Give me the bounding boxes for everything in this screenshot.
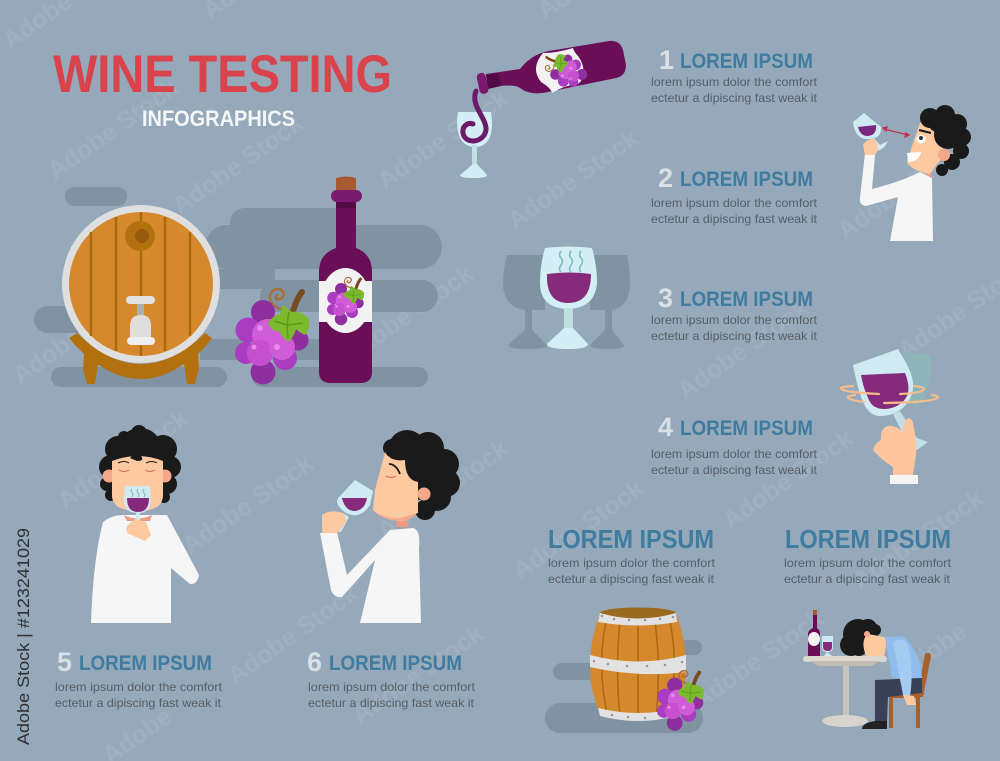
step 1 text: LOREM IPSUM xyxy=(680,50,813,73)
title xyxy=(53,45,392,131)
wine glass with pour xyxy=(457,91,492,178)
step 2 text xyxy=(651,163,818,226)
watermarks: Adobe Stock xyxy=(52,404,194,515)
grapes xyxy=(235,289,309,384)
step 3 text: lorem ipsum dolor the comfort xyxy=(651,313,818,327)
step 5 text: ectetur a dipiscing fast weak it xyxy=(55,696,222,710)
step 5 text xyxy=(55,647,223,710)
closing text left: LOREM IPSUM xyxy=(548,524,714,554)
step 3 text: LOREM IPSUM xyxy=(680,288,813,311)
person 5 smelling xyxy=(91,425,199,623)
watermarks: Adobe Stock xyxy=(672,294,814,405)
step 6 text: lorem ipsum dolor the comfort xyxy=(308,680,476,694)
watermarks: Adobe Stock xyxy=(372,434,514,545)
tap xyxy=(126,296,155,345)
background shadow shapes xyxy=(34,187,442,387)
watermarks: Adobe Stock xyxy=(847,484,989,595)
step 4 text xyxy=(651,412,818,477)
watermarks: Adobe Stock xyxy=(7,279,149,390)
pouring bottle xyxy=(476,41,626,95)
watermarks: Adobe Stock xyxy=(832,134,974,245)
watermarks: Adobe Stock xyxy=(167,109,309,220)
watermarks: Adobe Stock xyxy=(687,604,829,715)
wine bottle xyxy=(319,176,372,383)
step 6 text: LOREM IPSUM xyxy=(329,652,462,675)
watermarks: Adobe Stock xyxy=(222,579,364,690)
drunk man at table xyxy=(803,610,931,729)
watermarks: Adobe Stock xyxy=(337,259,479,370)
closing text right xyxy=(784,524,952,586)
step 4 text: LOREM IPSUM xyxy=(680,417,813,440)
closing text left: lorem ipsum dolor the comfort xyxy=(548,556,716,570)
step 1 text: lorem ipsum dolor the comfort xyxy=(651,75,818,89)
step 4 text: lorem ipsum dolor the comfort xyxy=(651,447,818,461)
closing text left: ectetur a dipiscing fast weak it xyxy=(548,572,715,586)
step 2 text: lorem ipsum dolor the comfort xyxy=(651,196,818,210)
arrow: eye to glass xyxy=(883,127,909,137)
step 4 text: ectetur a dipiscing fast weak it xyxy=(651,463,818,477)
watermarks: Adobe Stock xyxy=(717,424,859,535)
step 4 text: 4 xyxy=(658,412,673,442)
step 1 text xyxy=(651,45,818,105)
person 6 tasting xyxy=(320,430,460,623)
small barrel with grapes xyxy=(545,608,704,733)
step 3 text: ectetur a dipiscing fast weak it xyxy=(651,329,818,343)
three glasses xyxy=(503,246,630,349)
large barrel xyxy=(62,205,220,384)
step 3 text: 3 xyxy=(658,283,673,313)
step 2 text: ectetur a dipiscing fast weak it xyxy=(651,212,818,226)
watermarks: Adobe Stock xyxy=(42,74,184,185)
step 2 text: LOREM IPSUM xyxy=(680,168,813,191)
step 6 text: ectetur a dipiscing fast weak it xyxy=(308,696,475,710)
swirling glass in hand xyxy=(841,349,938,484)
step 5 text: LOREM IPSUM xyxy=(79,652,212,675)
title: WINE TESTING xyxy=(53,45,392,104)
closing text right: lorem ipsum dolor the comfort xyxy=(784,556,952,570)
step 2 text: 2 xyxy=(658,163,673,193)
step 1 text: ectetur a dipiscing fast weak it xyxy=(651,91,818,105)
step 1 text: 1 xyxy=(659,45,674,75)
stock id text: Adobe Stock | #123241029 xyxy=(14,528,33,745)
step 5 text: lorem ipsum dolor the comfort xyxy=(55,680,223,694)
title: INFOGRAPHICS xyxy=(142,106,295,131)
step 6 text xyxy=(307,647,476,710)
watermarks: Adobe Stock xyxy=(507,474,649,585)
step 3 text xyxy=(651,283,818,343)
closing text left xyxy=(548,524,716,586)
closing text right: ectetur a dipiscing fast weak it xyxy=(784,572,951,586)
step 6 text: 6 xyxy=(307,647,322,677)
closing text right: LOREM IPSUM xyxy=(785,524,951,554)
watermarks: Adobe Stock xyxy=(372,84,514,195)
person looking at wine xyxy=(853,105,971,241)
watermarks: Adobe Stock xyxy=(347,619,489,730)
watermarks: Adobe Stock xyxy=(502,124,644,235)
watermarks: Adobe xyxy=(892,617,972,685)
watermarks: Adobe Stock xyxy=(177,449,319,560)
step 5 text: 5 xyxy=(57,647,72,677)
